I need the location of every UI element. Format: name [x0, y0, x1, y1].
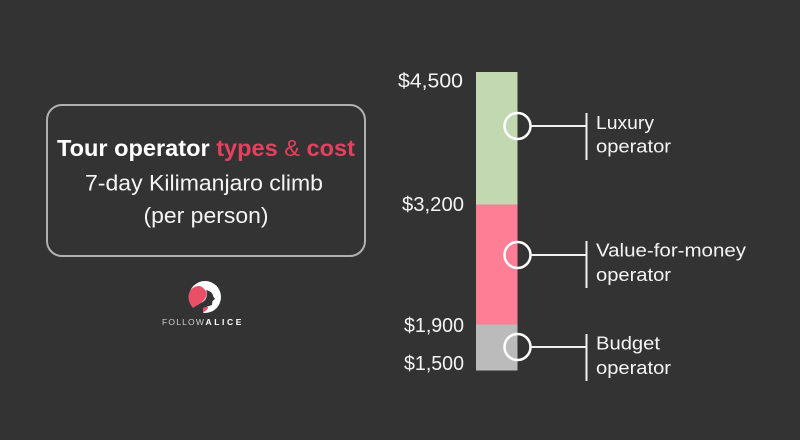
- subtitle line 1: 7-day Kilimanjaro climb: [85, 170, 323, 196]
- callout: value-for-money operator: [504, 240, 747, 288]
- title panel: [47, 105, 365, 256]
- bar segment: luxury: [476, 72, 518, 204]
- price label: $4,500: $4,500: [398, 70, 463, 92]
- logo wordmark: ALICE: [206, 317, 244, 327]
- callout: luxury operator: operator: [596, 136, 671, 156]
- bar segment: value-for-money: [476, 204, 518, 324]
- callout: luxury operator: [504, 112, 671, 160]
- price label: $1,900: $1,900: [404, 314, 464, 337]
- callout: budget operator: Budget: [596, 332, 660, 354]
- stacked cost bar: [476, 72, 518, 370]
- callout: value-for-money operator: operator: [596, 264, 671, 285]
- callout: budget operator: [504, 332, 671, 381]
- subtitle line 2: (per person): [144, 203, 268, 228]
- price label: $1,500: $1,500: [404, 352, 464, 375]
- heading: Tour operator types & cost: [57, 135, 355, 161]
- logo wordmark: FOLLOW: [162, 317, 205, 327]
- callout: luxury operator: Luxury: [596, 112, 655, 133]
- bar segment: budget: [476, 324, 518, 370]
- callout: budget operator: operator: [596, 357, 671, 378]
- callout: value-for-money operator: Value-for-money: [596, 240, 747, 260]
- icon: logo circle: [188, 281, 221, 314]
- logo wordmark: [162, 317, 244, 327]
- logo: [162, 281, 244, 327]
- price label: $3,200: $3,200: [402, 193, 464, 216]
